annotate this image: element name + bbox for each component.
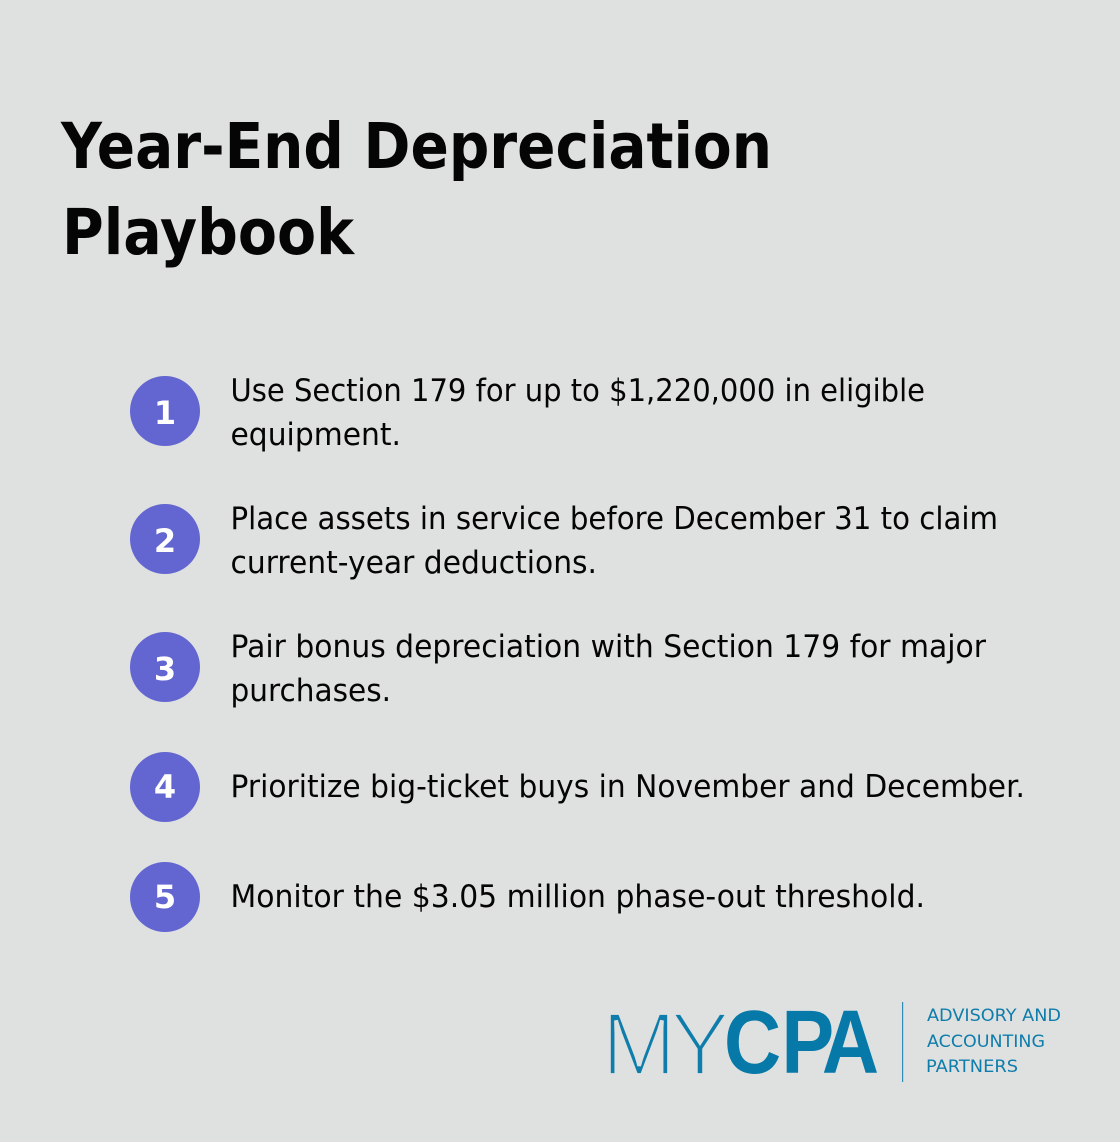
step 1 text: Use Section 179 for up to $1,220,000 in eligible bbox=[230, 373, 925, 409]
step 3 text bbox=[230, 629, 986, 709]
step 1 bbox=[130, 373, 925, 453]
title bbox=[60, 110, 772, 269]
step 4 text: Prioritize big-ticket buys in November and December. bbox=[230, 769, 1025, 805]
step 5 bbox=[130, 862, 925, 932]
badge 4: 4 bbox=[154, 768, 176, 806]
badge 1: 1 bbox=[154, 394, 176, 432]
badge 1 bbox=[130, 376, 200, 446]
badge 2: 2 bbox=[154, 522, 176, 560]
step 3 text: Pair bonus depreciation with Section 179 for major bbox=[230, 629, 986, 665]
logo divider bbox=[902, 1002, 903, 1082]
title: Playbook bbox=[62, 196, 356, 269]
logo tagline: PARTNERS bbox=[926, 1057, 1018, 1076]
step 1 text: equipment. bbox=[230, 417, 401, 453]
title: Year-End Depreciation bbox=[60, 110, 772, 183]
badge 4 bbox=[130, 752, 200, 822]
step 2 text: current-year deductions. bbox=[230, 545, 597, 581]
logo tagline: ACCOUNTING bbox=[927, 1032, 1045, 1051]
badge 2 bbox=[130, 504, 200, 574]
logo tagline: ADVISORY AND bbox=[927, 1006, 1061, 1025]
step 2 bbox=[130, 501, 998, 581]
badge 5: 5 bbox=[154, 878, 176, 916]
step 3 text: purchases. bbox=[230, 673, 391, 709]
step 2 text bbox=[230, 501, 998, 581]
step 4 bbox=[130, 752, 1025, 822]
logo tagline bbox=[926, 1006, 1061, 1076]
logo wordmark CPA: CPA bbox=[724, 991, 879, 1092]
badge 3: 3 bbox=[154, 650, 176, 688]
badge 5 bbox=[130, 862, 200, 932]
logo bbox=[602, 991, 1061, 1095]
step 1 text bbox=[230, 373, 925, 453]
step 3 bbox=[130, 629, 986, 709]
badge 3 bbox=[130, 632, 200, 702]
step 2 text: Place assets in service before December 31 to claim bbox=[230, 501, 998, 537]
logo wordmark MY: MY bbox=[602, 995, 730, 1095]
step 5 text: Monitor the $3.05 million phase-out threshold. bbox=[230, 879, 925, 915]
